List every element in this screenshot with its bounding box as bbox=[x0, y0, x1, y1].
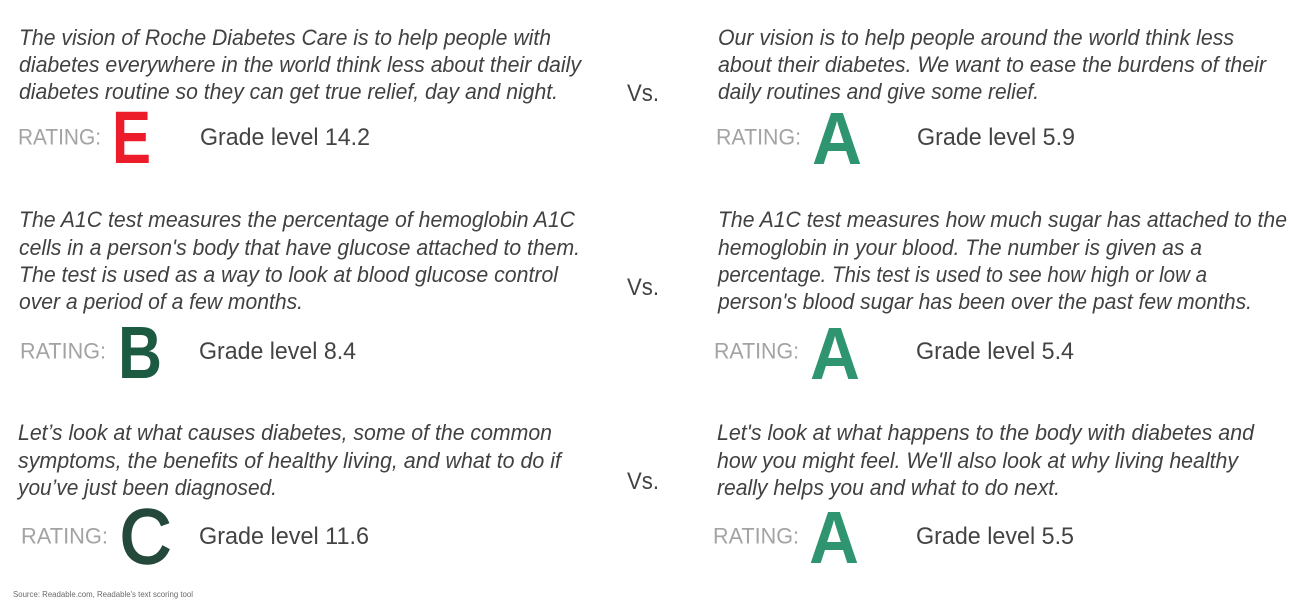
rating letter E: E bbox=[112, 96, 151, 179]
text block: rewritten vision statement bbox=[718, 25, 1267, 104]
text block: rewritten vision statement: about their diabetes. We want to ease the burdens of their bbox=[718, 52, 1267, 77]
rating label: RATING: bbox=[20, 338, 106, 364]
versus label 2: Vs. bbox=[627, 274, 659, 301]
text block: A1C clinical wording bbox=[19, 207, 580, 314]
text block: original overview bbox=[16, 420, 564, 500]
panel: row 3 left, original overview bbox=[16, 420, 564, 580]
rating label: RATING: bbox=[18, 124, 101, 150]
text block: A1C clinical wording: The A1C test measures the percentage of hemoglobin A1C bbox=[19, 207, 576, 232]
text block: plain overview: how you might feel. We'll also look at why living healthy bbox=[717, 448, 1240, 473]
versus label 1: Vs. bbox=[627, 80, 659, 107]
grade level: Grade level 14.2 bbox=[200, 124, 370, 151]
panel: row 1 right, rewritten statement bbox=[716, 25, 1267, 180]
text block: rewritten vision statement: daily routines and give some relief. bbox=[718, 79, 1039, 104]
text block: A1C plain wording: percentage. This test is used to see how high or low a bbox=[717, 262, 1207, 287]
source note: Source: Readable.com, Readable's text scoring tool bbox=[13, 590, 193, 599]
panel: row 1 left, Roche statement bbox=[18, 25, 583, 179]
text block: original overview: Let’s look at what causes diabetes, some of the common bbox=[18, 420, 552, 445]
panel: row 2 left, A1C clinical wording bbox=[19, 207, 580, 394]
text block: original overview: symptoms, the benefits of healthy living, and what to do if bbox=[18, 448, 564, 473]
text block: plain overview: really helps you and what to do next. bbox=[717, 475, 1060, 500]
grade level: Grade level 5.9 bbox=[917, 124, 1075, 151]
text block: Roche vision statement: diabetes routine so they can get true relief, day and night. bbox=[19, 79, 558, 104]
text block: Roche vision statement bbox=[19, 25, 583, 104]
text block: A1C plain wording: hemoglobin in your blood. The number is given as a bbox=[718, 235, 1202, 260]
text block: original overview: you’ve just been diagnosed. bbox=[16, 475, 277, 500]
text block: A1C clinical wording: cells in a person's body that have glucose attached to them. bbox=[19, 235, 580, 260]
versus label 3: Vs. bbox=[627, 468, 659, 495]
text block: rewritten vision statement: Our vision is to help people around the world think less bbox=[718, 25, 1234, 50]
panel: row 3 right, plain overview bbox=[713, 420, 1255, 579]
rating letter B: B bbox=[118, 311, 162, 394]
text block: Roche vision statement: diabetes everywhere in the world think less about their daily bbox=[19, 52, 583, 77]
rating letter A: A bbox=[812, 97, 862, 180]
rating label: RATING: bbox=[716, 124, 801, 150]
grade level: Grade level 5.4 bbox=[916, 338, 1074, 365]
rating letter C: C bbox=[120, 495, 171, 580]
grade level: Grade level 11.6 bbox=[199, 523, 369, 550]
text block: A1C plain wording bbox=[717, 207, 1287, 314]
panel: row 2 right, A1C plain wording bbox=[714, 207, 1287, 395]
text block: plain overview: Let's look at what happens to the body with diabetes and bbox=[717, 420, 1255, 445]
rating label: RATING: bbox=[713, 524, 799, 548]
text block: plain overview bbox=[717, 420, 1255, 500]
rating letter A: A bbox=[809, 496, 859, 579]
text block: A1C clinical wording: over a period of a few months. bbox=[19, 289, 303, 314]
grade level: Grade level 8.4 bbox=[199, 338, 356, 365]
grade level: Grade level 5.5 bbox=[916, 523, 1074, 550]
rating label: RATING: bbox=[21, 524, 108, 548]
text block: Roche vision statement: The vision of Roche Diabetes Care is to help people with bbox=[19, 25, 551, 50]
rating letter A: A bbox=[810, 312, 860, 395]
text block: A1C clinical wording: The test is used as a way to look at blood glucose control bbox=[19, 262, 559, 287]
text block: A1C plain wording: person's blood sugar has been over the past few months. bbox=[717, 289, 1252, 314]
rating label: RATING: bbox=[714, 338, 799, 364]
